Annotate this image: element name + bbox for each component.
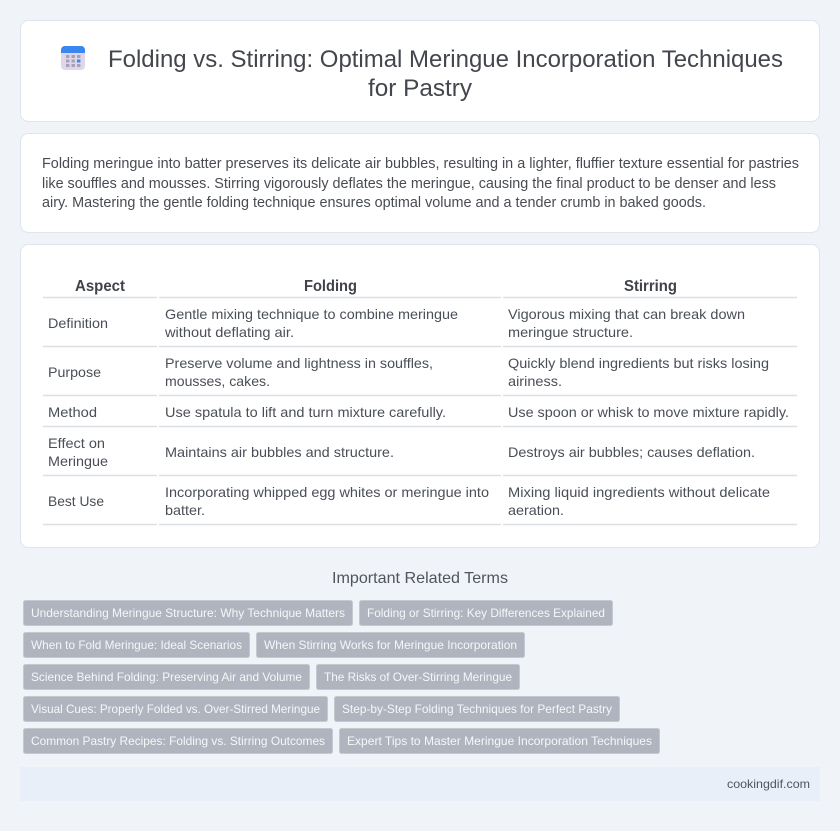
title: for Pastry <box>368 75 472 102</box>
table header row: Stirring <box>624 278 677 295</box>
table header row: Aspect <box>75 278 126 295</box>
tag <box>24 696 328 722</box>
row: effect on meringue: Effect on <box>48 435 105 451</box>
row: method: Use spatula to lift and turn mixture carefully. <box>165 404 446 420</box>
tag: Science Behind Folding: Preserving Air and Volume <box>31 670 302 684</box>
intro text: like souffles and mousses. Stirring vigorously deflates the meringue, causing the final product to be denser and less <box>42 176 776 192</box>
row: best use: Incorporating whipped egg whites or meringue into <box>165 484 489 500</box>
tag <box>334 696 620 722</box>
panel: comparison table <box>20 244 820 548</box>
tag: Understanding Meringue Structure: Why Technique Matters <box>31 606 345 620</box>
tag <box>24 632 250 658</box>
row: purpose: airiness. <box>508 373 562 389</box>
tag <box>24 728 332 754</box>
tag: Folding or Stirring: Key Differences Explained <box>367 606 605 620</box>
title <box>108 46 783 102</box>
row: definition: Definition <box>48 315 108 331</box>
row: purpose <box>43 355 797 396</box>
tag <box>24 600 352 626</box>
row: definition: without deflating air. <box>164 324 294 340</box>
row: definition: meringue structure. <box>508 324 633 340</box>
title: Folding vs. Stirring: Optimal Meringue Incorporation Techniques <box>108 46 783 73</box>
icon: calendar <box>61 46 85 70</box>
row: effect on meringue: Destroys air bubbles; causes deflation. <box>508 444 755 460</box>
tag: The Risks of Over-Stirring Meringue <box>324 670 512 684</box>
row: best use: Mixing liquid ingredients without delicate <box>508 484 770 500</box>
row: definition: Gentle mixing technique to combine meringue <box>165 306 458 322</box>
tag: Step-by-Step Folding Techniques for Perfect Pastry <box>342 702 612 716</box>
panel: introduction <box>20 134 820 232</box>
row: purpose: Purpose <box>48 364 101 380</box>
tag: Visual Cues: Properly Folded vs. Over-Stirred Meringue <box>31 702 320 716</box>
row: purpose: Quickly blend ingredients but risks losing <box>508 355 769 371</box>
tag <box>256 632 524 658</box>
row: method: Method <box>48 404 97 420</box>
related terms heading: Important Related Terms <box>332 570 508 587</box>
related terms tags <box>24 600 660 754</box>
table header row: Folding <box>304 278 357 295</box>
tag: Expert Tips to Master Meringue Incorporation Techniques <box>347 734 652 748</box>
row: effect on meringue: Maintains air bubbles and structure. <box>165 444 394 460</box>
row: best use: batter. <box>165 502 205 518</box>
footer source text: cookingdif.com <box>727 777 810 791</box>
row: method: Use spoon or whisk to move mixture rapidly. <box>508 404 789 420</box>
tag <box>316 664 520 690</box>
header panel <box>20 20 820 122</box>
footer bar <box>20 767 820 801</box>
tag: Common Pastry Recipes: Folding vs. Stirring Outcomes <box>31 734 325 748</box>
tag: When to Fold Meringue: Ideal Scenarios <box>31 638 242 652</box>
intro text: airy. Mastering the gentle folding technique ensures optimal volume and a tender crumb in baked goods. <box>42 195 706 211</box>
row: method <box>43 404 797 426</box>
row: best use: aeration. <box>508 502 564 518</box>
intro text <box>42 156 799 211</box>
row: effect on meringue <box>43 435 797 476</box>
tag <box>24 664 310 690</box>
row: purpose: mousses, cakes. <box>165 373 270 389</box>
row: definition: Vigorous mixing that can break down <box>508 306 745 322</box>
tag <box>360 600 612 626</box>
tag <box>340 728 660 754</box>
intro text: Folding meringue into batter preserves its delicate air bubbles, resulting in a lighter, fluffier texture essential for pastries <box>42 156 799 172</box>
row: best use: Best Use <box>48 493 104 509</box>
row: purpose: Preserve volume and lightness in souffles, <box>165 355 433 371</box>
table header row <box>43 278 797 298</box>
tag: When Stirring Works for Meringue Incorporation <box>264 638 517 652</box>
row: effect on meringue: Meringue <box>48 453 108 469</box>
row: best use <box>43 484 797 524</box>
row: definition <box>43 306 797 346</box>
